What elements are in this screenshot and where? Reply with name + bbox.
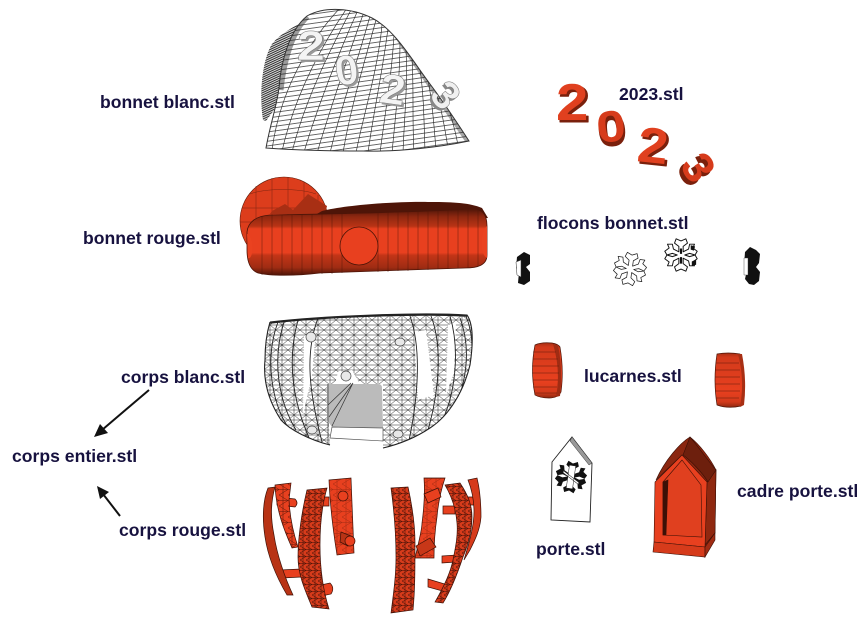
band side highlight right: [482, 226, 487, 258]
label: porte.stl: porte.stl: [536, 539, 605, 559]
label: bonnet blanc.stl: bonnet blanc.stl: [100, 92, 235, 112]
label: corps rouge.stl: corps rouge.stl: [119, 520, 246, 540]
second left arc mesh: [275, 483, 298, 548]
pompom ball: [240, 177, 328, 265]
right strip mesh: [391, 487, 415, 613]
frame side: [705, 470, 716, 545]
snowflake: tilted: [665, 239, 697, 271]
bonnet body mesh: [266, 10, 468, 151]
third left strip: [298, 488, 329, 609]
bowl rim: [270, 315, 467, 323]
label: 2023.stl: 2023.stl: [619, 84, 684, 104]
label: corps blanc.stl: corps blanc.stl: [121, 367, 245, 387]
snowflake: right edge-on: [744, 247, 760, 285]
pegs left: [277, 497, 333, 596]
model: right lucarne: [715, 353, 745, 407]
digit 3: 3: [671, 144, 725, 191]
door diagonal mesh lines: [328, 383, 353, 445]
digit 2: 2: [558, 75, 590, 133]
recess dark left side: [663, 480, 668, 535]
far right pegs: [428, 497, 474, 592]
embossed digit 2 second: 2: [377, 65, 409, 115]
frame roof stripe: [683, 437, 716, 482]
band segment lines: [262, 209, 478, 275]
base side: [705, 533, 715, 557]
digit 2: 2: [556, 73, 588, 131]
red band rim: [310, 202, 488, 218]
panel with two pegs: [329, 478, 354, 555]
outer right arc: [464, 478, 481, 560]
model: corps blanc wireframe: [260, 310, 476, 452]
snowflake: left edge-on: [516, 252, 530, 285]
model: bonnet blanc wireframe: [261, 8, 470, 152]
embossed digit 3: 3: [419, 75, 467, 121]
far right dense arc: [435, 483, 472, 603]
frame front: [654, 455, 707, 547]
digit 0: 0: [595, 105, 629, 157]
band side highlight left: [247, 234, 252, 258]
bonnet embossed 2023: [297, 22, 469, 121]
far right dense arc mesh: [435, 483, 472, 603]
panel mesh: [329, 478, 354, 555]
embossed digit 2: 2: [299, 24, 327, 71]
label: cadre porte.stl: cadre porte.stl: [737, 481, 858, 501]
round lucarne disc: [340, 227, 378, 265]
arrow: corps rouge to corps entier: [97, 486, 120, 516]
model: cadre porte: [653, 437, 716, 557]
right panel: [415, 478, 445, 558]
digit 2 second: 2: [635, 117, 671, 176]
door gray opening: [327, 384, 383, 428]
door sill: [330, 427, 383, 441]
right panel mesh: [415, 478, 445, 558]
embossed digit 0: 0: [334, 47, 363, 97]
panel pegs: [338, 491, 355, 546]
outer left arc: [263, 487, 293, 595]
label: corps entier.stl: corps entier.stl: [12, 446, 137, 466]
label: bonnet rouge.stl: bonnet rouge.stl: [83, 228, 221, 248]
snowflake: center: [612, 251, 648, 287]
bowl mesh: [265, 314, 472, 446]
second left arc: [275, 483, 298, 548]
arrow: corps blanc to corps entier: [94, 390, 149, 437]
frame inner recess: [663, 460, 702, 537]
third left strip mesh: [298, 488, 329, 609]
blank panels: [303, 322, 456, 415]
digit 0: 0: [594, 101, 628, 153]
embossed digit 2: 2: [297, 22, 325, 69]
right strip: [391, 487, 415, 613]
model: left lucarne: [532, 343, 562, 398]
frame back and roof: [656, 437, 716, 557]
model: porte: [551, 437, 592, 522]
digit 3: 3: [668, 147, 722, 194]
embossed digit 3: 3: [421, 73, 469, 119]
red band: [247, 209, 487, 275]
bowl longitudes: [271, 316, 472, 445]
bowl outline: [265, 314, 472, 448]
model: corps rouge pieces: [263, 478, 481, 613]
label: flocons bonnet.stl: flocons bonnet.stl: [537, 213, 688, 233]
bonnet outline: [266, 9, 469, 151]
model: bonnet rouge: [240, 177, 488, 275]
embossed digit 0: 0: [332, 45, 361, 95]
bonnet tail mesh: [261, 23, 300, 121]
base: [653, 542, 705, 557]
label: lucarnes.stl: lucarnes.stl: [584, 366, 682, 386]
embossed digit 2 second: 2: [379, 67, 411, 117]
right panel pegs: [416, 488, 441, 556]
model: red 2023 digits: [556, 73, 725, 194]
digit 2 second: 2: [637, 119, 673, 178]
inner pegs: [306, 332, 405, 438]
